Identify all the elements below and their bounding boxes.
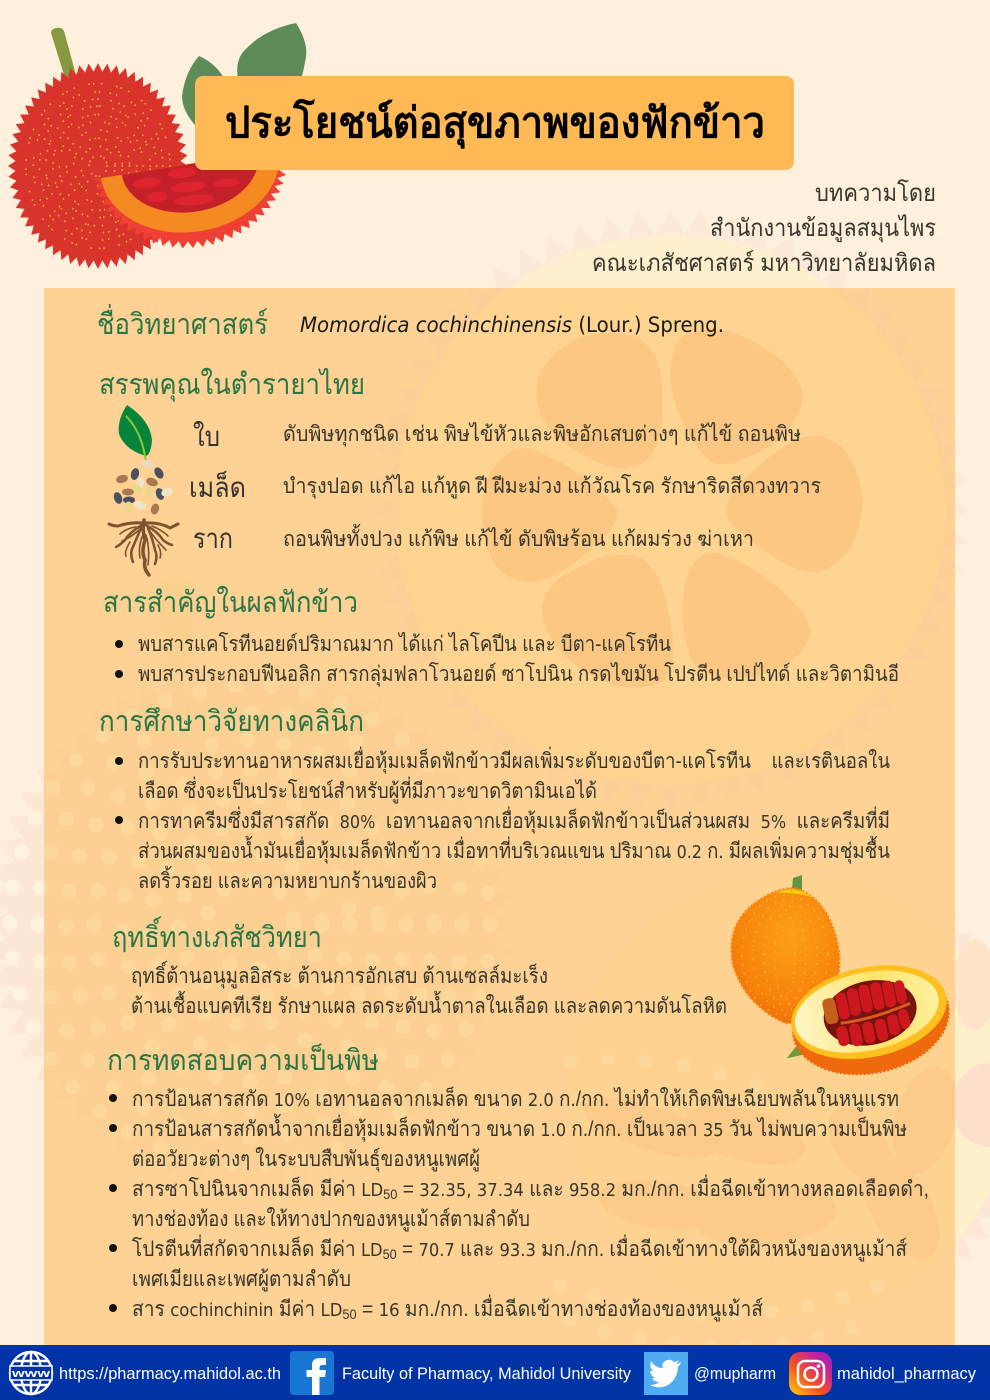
bullet list: ลดริ้วรอย และความหยาบกร้านของผิว [138, 866, 437, 893]
label: leaf: ใบ [193, 420, 220, 452]
heading: การทดสอบความเป็นพิษ [107, 1042, 379, 1077]
bullet list: ส่วนผสมของน้ำมันเยื่อหุ้มเมล็ดฟักข้าว เมื่อทาที่บริเวณแขน ปริมาณ 0.2 ก. มีผลเพิ่มความชุ่มชื้น [138, 836, 890, 864]
icon: root [109, 520, 178, 575]
bullet list: 50 [383, 1186, 398, 1202]
scientific name: Momordica cochinchinensis (Lour.) Spreng. [300, 313, 724, 337]
bullet list: พบสารประกอบฟีนอลิก สารกลุ่มฟลาโวนอยด์ ซาโปนิน กรดไขมัน โปรตีน เปปไทด์ และวิตามินอี [138, 662, 899, 687]
cut half [94, 163, 286, 248]
bullet list: การป้อนสารสกัดน้ำจากเยื่อหุ้มเมล็ดฟักข้าว ขนาด 1.0 ก./กก. เป็นเวลา 35 วัน ไม่พบความเป็นพิษ [132, 1114, 907, 1142]
instagram handle: mahidol_pharmacy [837, 1364, 976, 1383]
footer bar [0, 1345, 990, 1400]
label: root: ราก [193, 523, 233, 554]
section: clinical studies [99, 706, 890, 893]
text block [131, 960, 727, 1018]
bullet list [109, 1085, 929, 1322]
section: key compounds [103, 585, 899, 687]
bullet list [115, 632, 899, 687]
label: seed: เมล็ด [189, 470, 246, 503]
heading: การศึกษาวิจัยทางคลินิก [99, 706, 364, 738]
bullet list: การรับประทานอาหารผสมเยื่อหุ้มเมล็ดฟักข้าวมีผลเพิ่มระดับของบีตา-แคโรทีน และเรตินอลใน [138, 746, 890, 774]
bullet list: ทางช่องท้อง และให้ทางปากของหนูเม้าส์ตามลำดับ [132, 1207, 530, 1232]
text block: ต้านเชื้อแบคทีเรีย รักษาแผล ลดระดับน้ำตาลในเลือด และลดความดันโลหิต [131, 991, 727, 1018]
icon: leaf [119, 405, 152, 462]
bullet list: สาร cochinchinin มีค่า LD [132, 1298, 344, 1321]
heading: ฤทธิ์ทางเภสัชวิทยา [112, 916, 322, 954]
text: leaf uses: ดับพิษทุกชนิด เช่น พิษไข้หัวและพิษอักเสบต่างๆ แก้ไข้ ถอนพิษ [283, 422, 801, 447]
leaf: small [182, 56, 224, 135]
icon: twitter [644, 1352, 688, 1395]
background decoration inside panel [108, 330, 955, 1259]
bullet list: เพศเมียและเพศผู้ตามลำดับ [132, 1268, 351, 1292]
bullet list: การป้อนสารสกัด 10% เอทานอลจากเมล็ด ขนาด 2.0 ก./กก. ไม่ทำให้เกิดพิษเฉียบพลันในหนูแรท [132, 1085, 899, 1112]
leaf: large [237, 23, 306, 88]
seeds [133, 167, 240, 207]
title banner: ประโยชน์ต่อสุขภาพของฟักข้าว [225, 98, 765, 149]
scientific name [97, 304, 724, 341]
text: seed uses: บำรุงปอด แก้ไอ แก้หูด ฝี ฝีมะม่วง แก้วัณโรค รักษาริดสีดวงทวาร [283, 474, 821, 499]
halved fruit [772, 952, 959, 1090]
panel: content background [44, 288, 955, 1345]
section: traditional uses [99, 367, 821, 575]
text block: ฤทธิ์ต้านอนุมูลอิสระ ต้านการอักเสบ ต้านเซลล์มะเร็ง [131, 960, 548, 989]
whole fruit body [8, 30, 217, 289]
heading: สรรพคุณในตำรายาไทย [99, 367, 365, 402]
scientific name: ชื่อวิทยาศาสตร์ [97, 304, 268, 341]
bullet list: 50 [383, 1246, 397, 1262]
icon: spiky red gac fruit with cut half [8, 23, 306, 269]
icon: instagram [789, 1352, 832, 1395]
section: toxicity [107, 1042, 929, 1322]
bullet list: = 32.35, 37.34 และ 958.2 มก./กก. เมื่อฉีดเข้าทางหลอดเลือดดำ, [403, 1178, 959, 1201]
byline: คณะเภสัชศาสตร์ มหาวิทยาลัยมหิดล [592, 249, 936, 277]
title banner [195, 76, 794, 170]
icon: facebook [290, 1351, 334, 1395]
byline: สำนักงานข้อมูลสมุนไพร [710, 214, 936, 243]
whole fruit [731, 875, 840, 1023]
bullet list: สารซาโปนินจากเมล็ด มีค่า LD [132, 1178, 385, 1201]
byline [592, 179, 936, 277]
bullet list: โปรตีนที่สกัดจากเมล็ด มีค่า LD [132, 1238, 385, 1261]
icon: www globe [10, 1352, 52, 1394]
bullet list: พบสารแคโรทีนอยด์ปริมาณมาก ได้แก่ ไลโคปีน และ บีตา-แคโรทีน [138, 632, 671, 656]
website: https://pharmacy.mahidol.ac.th [59, 1364, 281, 1383]
faculty name: Faculty of Pharmacy, Mahidol University [342, 1364, 631, 1383]
bullet list: การทาครีมซึ่งมีสารสกัด 80% เอทานอลจากเยื่อหุ้มเมล็ดฟักข้าวเป็นส่วนผสม 5% และครีมที่มี [138, 806, 890, 834]
bullet list: 50 [342, 1306, 357, 1322]
bullet list [115, 746, 890, 893]
section: pharmacology [112, 916, 727, 1018]
stem [51, 28, 76, 78]
icon: seeds [112, 458, 174, 515]
text: root uses: ถอนพิษทั้งปวง แก้พิษ แก้ไข้ ดับพิษร้อน แก้ผมร่วง ฆ่าเหา [283, 524, 754, 551]
bullet list: เลือด ซึ่งจะเป็นประโยชน์สำหรับผู้ที่มีภาวะขาดวิตามินเอได้ [138, 776, 597, 804]
bullet list: = 16 มก./กก. เมื่อฉีดเข้าทางช่องท้องของหนูเม้าส์ [362, 1298, 796, 1321]
bullet list: ต่ออวัยวะต่างๆ ในระบบสืบพันธุ์ของหนูเพศผู้ [132, 1147, 480, 1172]
handle: @mupharm [694, 1364, 776, 1383]
image: gac fruit whole and halved [731, 875, 959, 1090]
heading: สารสำคัญในผลฟักข้าว [103, 585, 358, 619]
bullet list: = 70.7 และ 93.3 มก./กก. เมื่อฉีดเข้าทางใต้ผิวหนังของหนูเม้าส์ [403, 1238, 945, 1261]
icon: www globe: www [11, 1368, 51, 1380]
byline: บทความโดย [815, 179, 936, 207]
